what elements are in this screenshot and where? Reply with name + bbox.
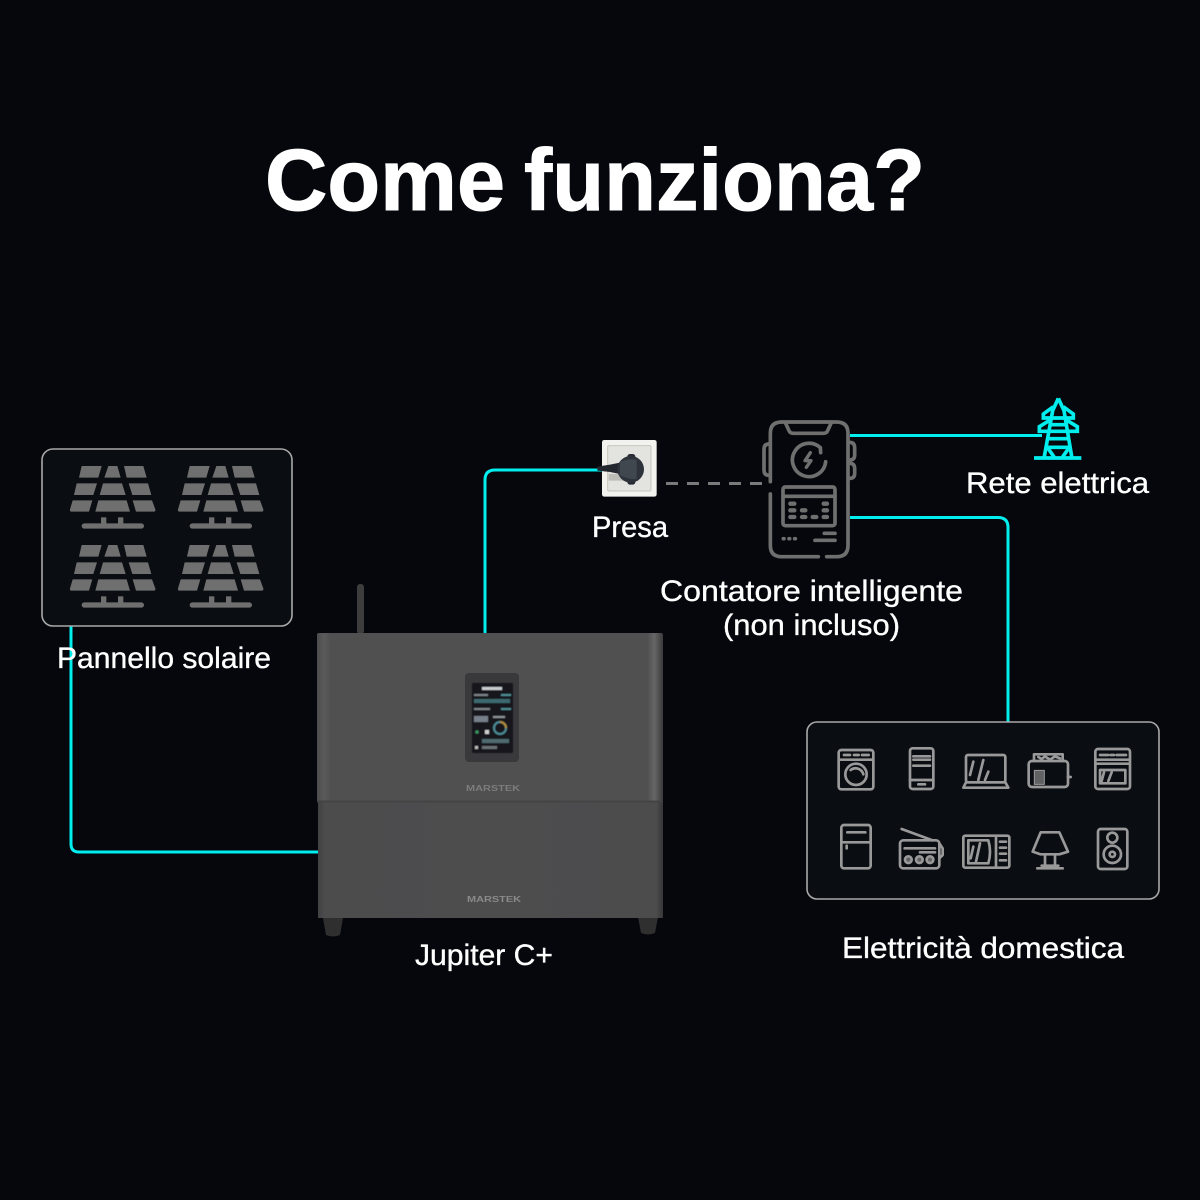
- connection line: solar panel to battery: [71, 626, 318, 852]
- icon: radio: [900, 829, 943, 868]
- icon: solar panel array: [70, 466, 263, 608]
- connection line: smart meter to home appliances: [850, 518, 1008, 722]
- battery: Jupiter C+: [317, 584, 663, 936]
- upper body: [317, 633, 663, 802]
- label: smart meter: [660, 575, 963, 642]
- label: smart meter: (non incluso): [723, 609, 900, 642]
- panel: solar panels: [42, 449, 292, 626]
- icon: washing machine: [839, 750, 873, 789]
- dashed link: socket to smart meter: [666, 482, 763, 485]
- icon: speaker: [1098, 829, 1127, 869]
- icon: toaster: [1029, 754, 1071, 787]
- icon: microwave: [963, 836, 1009, 868]
- brand text upper: MARSTEK: [466, 784, 520, 793]
- label: socket: Presa: [592, 511, 668, 544]
- title: Come: [265, 132, 505, 229]
- icon: table lamp: [1033, 832, 1068, 868]
- label: solar panel: Pannello solaire: [57, 642, 271, 675]
- icon: smart meter: [764, 422, 855, 557]
- title: [265, 132, 925, 229]
- label: power grid: Rete elettrica: [966, 467, 1149, 500]
- label: battery: Jupiter C+: [415, 939, 553, 972]
- antenna: [357, 584, 364, 634]
- icons: appliances: [839, 748, 1130, 869]
- icon: wall socket with plug: [597, 440, 657, 497]
- title: funziona?: [524, 132, 925, 229]
- feet: [323, 918, 343, 936]
- icon: oven: [1095, 749, 1130, 789]
- lower body: [318, 802, 663, 918]
- icon: power pylon: [1034, 398, 1081, 458]
- display bezel: [465, 673, 519, 762]
- display screen: [472, 683, 513, 753]
- label: smart meter: Contatore intelligente: [660, 575, 963, 608]
- icon: fridge tall: [910, 748, 933, 789]
- icon: refrigerator: [841, 825, 871, 868]
- panel: household appliances: [807, 722, 1159, 899]
- connection line: smart meter to grid: [850, 434, 1042, 437]
- brand text lower: MARSTEK: [467, 895, 521, 904]
- icon: laptop: [963, 755, 1008, 788]
- label: household electricity: Elettricità domestica: [842, 932, 1124, 965]
- connection line: battery to socket: [485, 470, 602, 634]
